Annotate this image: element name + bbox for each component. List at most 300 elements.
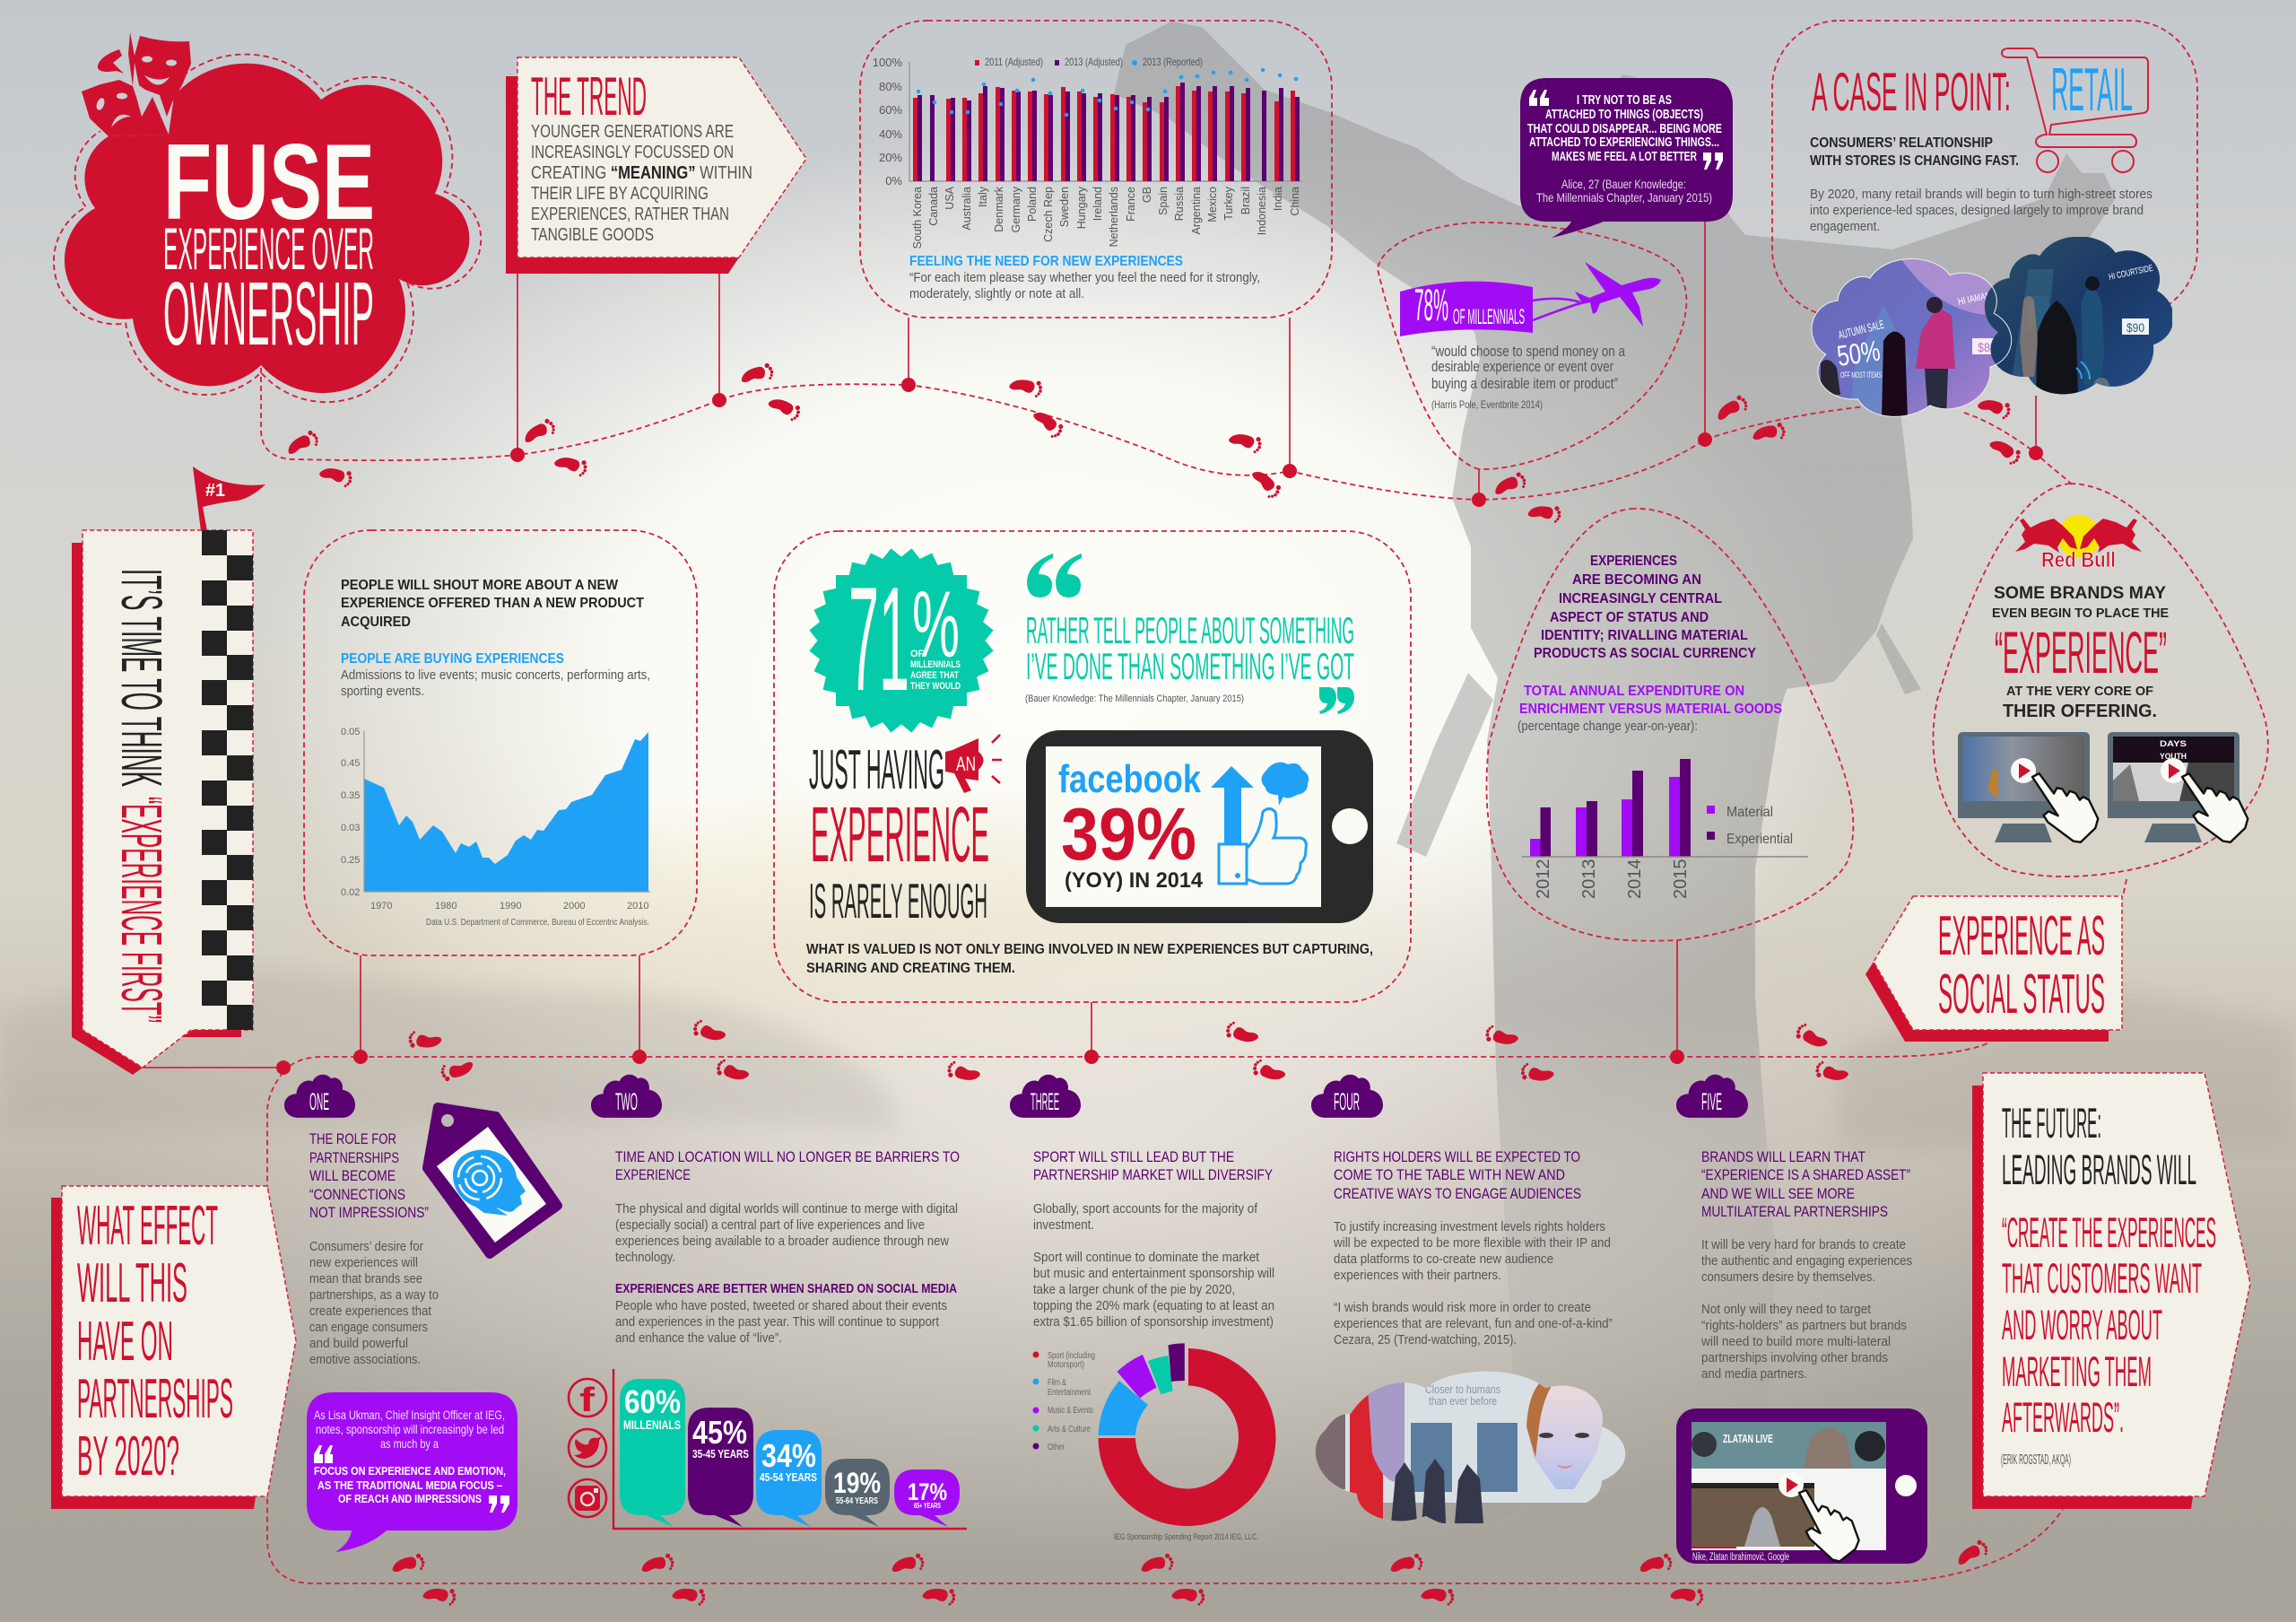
title cloud: Fuse: EXPERIENCE OVER: [163, 215, 374, 282]
trend body text: CREATING “MEANING” WITHIN: [531, 163, 752, 183]
image cloud: autumn sale store: $85: [1978, 340, 1996, 354]
section two body: The physical and digital worlds will continue to merge with digital: [615, 1201, 958, 1216]
area chart: Data U.S. Department of Commerce, Bureau of Eccentric Analysis.: [426, 918, 649, 928]
bar chart by country: India: [1272, 187, 1284, 211]
section five body: will need to build more multi-lateral: [1700, 1334, 1891, 1349]
panel: 78% of millennials: [1378, 222, 1686, 469]
section one body: [309, 1239, 439, 1367]
chart heading: [1518, 684, 1782, 734]
section five body: and media partners.: [1701, 1366, 1807, 1382]
trend body text: [531, 122, 752, 245]
image cloud: courtside store: [1983, 237, 2172, 396]
area chart: 0.05: [341, 727, 360, 737]
retail body text: engagement.: [1810, 219, 1880, 234]
purple statement: ASPECT OF STATUS AND: [1550, 610, 1709, 625]
section five body: It will be very hard for brands to create: [1701, 1237, 1906, 1252]
text: “EXPERIENCE FIRST”: [109, 797, 174, 1023]
panel: 71% of millennials: JUST HAVING: [809, 739, 944, 801]
image cloud: autumn sale store: 50%: [1835, 335, 1883, 372]
callout: lisa ukman quote: FOCUS ON EXPERIENCE AND EMOTION,: [314, 1465, 506, 1478]
bar chart by country: GB: [1141, 187, 1153, 203]
panel: what effect will this have: WHAT EFFECT: [77, 1195, 218, 1257]
quote text: [1431, 343, 1625, 411]
chart heading: TOTAL ANNUAL EXPENDITURE ON: [1524, 684, 1744, 699]
speech bar 19%: [825, 1459, 890, 1527]
trend body text: EXPERIENCES, RATHER THAN: [531, 205, 729, 224]
section five body: consumers desire by themselves.: [1701, 1269, 1875, 1285]
purple quote bubble: Alice: [1520, 78, 1733, 238]
section two heading: TIME AND LOCATION WILL NO LONGER BE BARRIERS TO: [615, 1149, 960, 1165]
badge: 71%: 71: [848, 556, 909, 721]
bar chart by country: Australia: [961, 187, 973, 231]
panel: 71% of millennials: IS RARELY ENOUGH: [809, 873, 987, 929]
closing quote mark: [1703, 153, 1723, 170]
subheading and description: PEOPLE ARE BUYING EXPERIENCES: [341, 651, 564, 667]
panel: red bull: [1933, 484, 2268, 876]
section one body: new experiences will: [309, 1255, 418, 1270]
donut legend: Sport (including: [1048, 1351, 1095, 1361]
section three heading: PARTNERSHIP MARKET WILL DIVERSIFY: [1033, 1167, 1273, 1183]
icon: thumbs up: [1219, 809, 1306, 884]
speech bar 17%: 17%: [908, 1478, 947, 1505]
panel: the future: [1972, 1073, 2250, 1509]
future heading: THE FUTURE:: [2002, 1099, 2101, 1147]
bar chart: material vs experiential: [1522, 759, 1808, 899]
checker pattern: [202, 530, 253, 1030]
quote text: THAT COULD DISAPPEAR... BEING MORE: [1527, 122, 1722, 136]
red bull statement: THEIR OFFERING.: [2003, 702, 2157, 721]
bar chart: material vs experiential: 2014: [1625, 859, 1645, 899]
bar chart by country: [873, 56, 1302, 249]
section three: [1010, 1075, 1275, 1542]
speech bar 45%: [688, 1408, 753, 1527]
opening quote mark: [1529, 90, 1549, 106]
donut legend: Film &: [1048, 1378, 1066, 1388]
quote source: [1536, 177, 1712, 205]
area chart: 1990: [500, 901, 521, 911]
panel heading: EXPERIENCE OFFERED THAN A NEW PRODUCT: [341, 596, 644, 611]
subheading: CONSUMERS’ RELATIONSHIP: [1810, 135, 1993, 151]
section three body: but music and entertainment sponsorship will: [1033, 1266, 1274, 1281]
question heading: BY 2020?: [77, 1426, 179, 1487]
badge: two: [591, 1075, 662, 1118]
callout: lisa ukman quote: notes, sponsorship will increasingly be led: [316, 1423, 504, 1436]
section four heading: [1334, 1149, 1581, 1202]
red bull statement: SOME BRANDS MAY: [1994, 584, 2166, 603]
donut legend: Motorsport): [1048, 1360, 1084, 1370]
logo: red bull: Red Bull: [2041, 548, 2116, 572]
purple statement: INCREASINGLY CENTRAL: [1559, 591, 1722, 606]
purple statement: [1534, 554, 1756, 661]
panel: 71% of millennials: [774, 531, 1411, 1002]
heading: feeling the need: FEELING THE NEED FOR NEW EXPERIENCES: [909, 254, 1183, 269]
speech bar 34%: 45-54 YEARS: [760, 1470, 817, 1484]
section one heading: THE ROLE FOR: [309, 1131, 396, 1147]
section two body: (especially social) a central part of live experiences and live: [615, 1217, 925, 1233]
bar chart by country: China: [1289, 187, 1301, 216]
section five body: partnerships involving other brands: [1701, 1350, 1888, 1365]
section four body: will be expected to be more flexible with their IP and: [1333, 1235, 1611, 1251]
speech bar 34%: [756, 1430, 822, 1527]
video monitor two: YOUTH: [2160, 752, 2187, 761]
legend: [1707, 805, 1793, 847]
section two body: EXPERIENCES ARE BETTER WHEN SHARED ON SOCIAL MEDIA: [615, 1281, 957, 1296]
quote text: [1527, 93, 1722, 164]
speech bar 19%: 55-64 YEARS: [836, 1496, 878, 1506]
section four body: experiences that are relevant, fun and one-of-a-kind”: [1334, 1316, 1613, 1331]
section five body: “rights-holders” as partners but brands: [1701, 1318, 1907, 1333]
bar chart by country: 80%: [879, 80, 902, 93]
footprints along the trails: [284, 362, 2023, 1607]
bar chart by country: 40%: [879, 127, 902, 141]
red bull statement: EVEN BEGIN TO PLACE THE: [1992, 606, 2169, 621]
icon: megaphone: AN: [956, 753, 976, 775]
retail body text: into experience-led spaces, designed largely to improve brand: [1810, 203, 2144, 218]
area chart: 0.25: [341, 855, 360, 866]
donut chart: IEG Sponsorship Spending Report 2014 IEG, LLC.: [1114, 1532, 1258, 1542]
bar chart by country: 60%: [879, 103, 902, 117]
section five heading: BRANDS WILL LEARN THAT: [1701, 1149, 1866, 1165]
bar chart: material vs experiential: 2013: [1579, 859, 1599, 899]
bar chart: material vs experiential: 2012: [1534, 859, 1553, 899]
panel heading: [341, 578, 644, 630]
section two body: technology.: [615, 1250, 675, 1265]
panel heading: PEOPLE WILL SHOUT MORE ABOUT A NEW: [341, 578, 618, 593]
section two body: and enhance the value of “live”.: [615, 1330, 782, 1346]
bar chart by country: Spain: [1157, 187, 1170, 215]
donut legend: Entertainment: [1048, 1388, 1091, 1398]
panel heading: ACQUIRED: [341, 615, 411, 630]
area chart: 0.45: [341, 758, 360, 769]
section one body: create experiences that: [309, 1304, 432, 1319]
section four body: Cezara, 25 (Trend-watching, 2015).: [1334, 1332, 1517, 1347]
donut legend: [1033, 1351, 1095, 1452]
speech bar 45%: 45%: [692, 1414, 747, 1451]
chart legend: 2013 (Adjusted): [1065, 56, 1123, 68]
closing statement: WHAT IS VALUED IS NOT ONLY BEING INVOLVED IN NEW EXPERIENCES BUT CAPTURING,: [806, 942, 1373, 957]
badge: 71%: AGREE THAT: [910, 670, 959, 681]
badge: one: [284, 1075, 355, 1118]
panel: the trend: [506, 57, 806, 274]
panel: a case in point, retail: [1772, 21, 2197, 422]
subheading: WITH STORES IS CHANGING FAST.: [1810, 153, 2019, 169]
quote text: ATTACHED TO EXPERIENCING THINGS...: [1529, 135, 1719, 150]
icon: up arrow: [1211, 766, 1254, 844]
section three body: Sport will continue to dominate the market: [1033, 1250, 1260, 1265]
section four heading: CREATIVE WAYS TO ENGAGE AUDIENCES: [1334, 1186, 1581, 1202]
section five heading: AND WE WILL SEE MORE: [1701, 1186, 1855, 1202]
banner: OF MILLENNIALS: [1453, 305, 1525, 329]
purple statement: IDENTITY; RIVALLING MATERIAL: [1541, 628, 1748, 643]
red bull statement: AT THE VERY CORE OF: [2006, 684, 2153, 699]
quote text: buying a desirable item or product”: [1431, 375, 1618, 392]
quote marks: [1027, 554, 1082, 597]
quote text: “would choose to spend money on a: [1431, 343, 1625, 360]
purple statement: PRODUCTS AS SOCIAL CURRENCY: [1534, 646, 1756, 661]
bar chart by country: Hungary: [1075, 186, 1088, 229]
donut legend: Other: [1048, 1443, 1065, 1452]
section one body: mean that brands see: [309, 1271, 422, 1286]
panel: material vs experiential spending: [1487, 509, 1853, 941]
area chart: 0.03: [341, 823, 360, 833]
section four body: “I wish brands would risk more in order to create: [1334, 1300, 1591, 1315]
section three body: extra $1.65 billion of sponsorship investment): [1033, 1314, 1274, 1330]
section one heading: PARTNERSHIPS: [309, 1150, 399, 1166]
phone with facebook stat: [1026, 730, 1373, 923]
icons: social media: [569, 1379, 606, 1517]
tablet: zlatan live: [1676, 1408, 1927, 1564]
image cloud: autumn sale store: OFF MOST ITEMS: [1840, 371, 1882, 379]
area chart: 2000: [563, 901, 585, 911]
bar chart by country: Mexico: [1206, 187, 1219, 222]
tablet: zlatan live: ZLATAN LIVE: [1723, 1432, 1773, 1445]
quote text: desirable experience or event over: [1431, 358, 1613, 375]
bar chart by country: 0%: [885, 174, 902, 187]
section two: [569, 1075, 967, 1529]
chart legend: 2011 (Adjusted): [985, 56, 1043, 68]
section five: [1676, 1075, 1927, 1564]
panel: the trend: THE TREND: [531, 66, 647, 126]
future heading: [2002, 1099, 2196, 1193]
quote source: The Millennials Chapter, January 2015): [1536, 190, 1712, 205]
section five heading: “EXPERIENCE IS A SHARED ASSET”: [1701, 1167, 1910, 1183]
section four: [1311, 1075, 1627, 1529]
section one heading: “CONNECTIONS: [309, 1187, 405, 1203]
badge: 71%: OF: [910, 649, 925, 659]
section two heading: [615, 1149, 960, 1183]
donut chart: [1033, 1343, 1275, 1542]
banner text: IT’S TIME TO THINK: [109, 569, 174, 787]
panel: 71% of millennials: I’VE DONE THAN SOMETHING I’VE GOT: [1026, 645, 1354, 687]
section one body: and build powerful: [309, 1336, 408, 1351]
closing statement: [806, 942, 1373, 976]
section one body: can engage consumers: [309, 1320, 428, 1335]
bar chart by country: Russia: [1173, 187, 1186, 221]
speech bar 60%: MILLENIALS: [623, 1417, 681, 1432]
banner: [1400, 280, 1580, 336]
section three body: take a larger chunk of the pie by 2020,: [1033, 1282, 1235, 1297]
survey question text: “For each item please say whether you feel the need for it strongly,: [909, 271, 1260, 285]
purple statement: ARE BECOMING AN: [1572, 572, 1701, 588]
subheading and description: Admissions to live events; music concerts, performing arts,: [341, 668, 650, 683]
top journey trail: [261, 222, 2072, 507]
section four body: data platforms to co-create new audience: [1334, 1251, 1553, 1267]
phone with facebook stat: (YOY) IN 2014: [1065, 868, 1204, 893]
section four body: experiences with their partners.: [1334, 1268, 1501, 1283]
chart legend: 2013 (Reported): [1143, 56, 1203, 68]
quote source: (Bauer Knowledge: The Millennials Chapter, January 2015): [1025, 693, 1244, 704]
panel: what effect will this have: PARTNERSHIPS: [77, 1368, 233, 1430]
icon: price tag with head: [427, 1107, 558, 1254]
section three body: Globally, sport accounts for the majority of: [1033, 1201, 1258, 1216]
badge: four: [1311, 1075, 1383, 1118]
lower journey trail: [143, 879, 2126, 1583]
section one: [284, 1075, 558, 1552]
donut legend: Arts & Culture: [1048, 1425, 1091, 1435]
bar chart by country: Canada: [927, 187, 940, 226]
bar chart by country: Denmark: [993, 186, 1005, 232]
bar chart by country: Indonesia: [1256, 187, 1268, 235]
chart heading: ENRICHMENT VERSUS MATERIAL GOODS: [1519, 702, 1782, 717]
badge: three: [1010, 1075, 1081, 1118]
bar chart by country: Argentina: [1190, 187, 1203, 235]
image cloud: autumn sale store: AUTUMN SALE: [1837, 318, 1885, 342]
callout: lisa ukman quote: AS THE TRADITIONAL MEDIA FOCUS –: [317, 1479, 502, 1492]
social status heading: [1938, 905, 2105, 1025]
text: RATHER TELL PEOPLE ABOUT SOMETHING: [1026, 609, 1354, 651]
title text: [163, 122, 375, 364]
speech bar 45%: 35-45 YEARS: [692, 1447, 749, 1461]
section three body: investment.: [1033, 1217, 1094, 1233]
trend body text: YOUNGER GENERATIONS ARE: [531, 122, 734, 142]
title cloud: Fuse: [54, 32, 481, 402]
badge: 71%: %: [912, 572, 960, 677]
section three body: [1033, 1201, 1274, 1330]
quote text: I TRY NOT TO BE AS: [1577, 93, 1672, 108]
section two heading: EXPERIENCE: [615, 1167, 691, 1183]
section three body: topping the 20% mark (equating to at least an: [1033, 1298, 1274, 1313]
bar chart by country: South Korea: [911, 187, 924, 249]
panel: 71% of millennials: EXPERIENCE: [811, 791, 989, 878]
subheading and description: sporting events.: [341, 685, 424, 699]
flag with #1: #1: [205, 481, 225, 501]
speech bar 34%: 34%: [761, 1437, 816, 1474]
speech bar 17%: [894, 1469, 960, 1527]
area chart: 0.35: [341, 790, 360, 801]
retail body text: [1810, 187, 2152, 234]
bar chart by country: 100%: [873, 56, 902, 69]
title cloud: Fuse: OWNERSHIP: [163, 264, 374, 364]
section one heading: NOT IMPRESSIONS”: [309, 1205, 429, 1221]
panel: what effect will this have: [51, 1186, 296, 1509]
image cloud: autumn sale store: [1812, 259, 1998, 416]
bar chart by country: Ireland: [1091, 187, 1104, 221]
trend body text: TANGIBLE GOODS: [531, 225, 654, 245]
panel: experience as social status: [1866, 896, 2122, 1042]
section four heading: RIGHTS HOLDERS WILL BE EXPECTED TO: [1334, 1149, 1580, 1165]
bar chart: material vs experiential: 2015: [1671, 859, 1691, 899]
purple statement: EXPERIENCES: [1590, 554, 1677, 569]
callout: lisa ukman quote: OF REACH AND IMPRESSIONS: [338, 1493, 482, 1505]
section five heading: MULTILATERAL PARTNERSHIPS: [1701, 1204, 1888, 1220]
section five body: the authentic and engaging experiences: [1701, 1253, 1912, 1269]
lettering: just having an experience: [809, 739, 989, 929]
subheading and description: [341, 651, 650, 699]
section two body: experiences being available to a broader audience through new: [615, 1234, 949, 1249]
closing statement: SHARING AND CREATING THEM.: [806, 961, 1015, 976]
bar chart by country: Brazil: [1239, 187, 1252, 214]
title text: FUSE: [163, 122, 375, 242]
area chart: 1970: [370, 901, 392, 911]
section five body: [1700, 1237, 1912, 1382]
silhouette of person with arms raised: [1114, 22, 2116, 1622]
badge: five: [1676, 1075, 1748, 1118]
icon: theatre masks: [82, 32, 191, 136]
section two body: People who have posted, tweeted or shared about their events: [615, 1298, 947, 1313]
retail body text: By 2020, many retail brands will begin to turn high-street stores: [1810, 187, 2152, 202]
bar chart by country: Czech Rep: [1042, 187, 1055, 242]
checkered banner: experience first: [72, 530, 253, 1075]
bar chart by country: Sweden: [1058, 187, 1071, 227]
panel: area chart, people are buying experiences: [304, 530, 697, 955]
badge: three: THREE: [1031, 1088, 1059, 1115]
quote text: MAKES ME FEEL A LOT BETTER: [1552, 150, 1697, 164]
phone with facebook stat: facebook: [1058, 757, 1201, 801]
section three heading: [1033, 1149, 1273, 1183]
legend: Material: [1726, 805, 1773, 820]
badge: five: FIVE: [1701, 1088, 1722, 1115]
bar chart by country: Poland: [1026, 187, 1039, 222]
chart heading: (percentage change year-on-year):: [1518, 719, 1698, 734]
icons: social media: f: [579, 1382, 595, 1419]
section four body: [1333, 1219, 1613, 1347]
section one body: Consumers’ desire for: [309, 1239, 423, 1254]
icon: speech cloud: [1261, 763, 1309, 806]
callout: lisa ukman quote: As Lisa Ukman, Chief Insight Officer at IEG,: [314, 1408, 505, 1422]
icon: megaphone: [945, 735, 1002, 793]
bar chart by country: 20%: [879, 151, 902, 164]
video monitor one: [1958, 732, 2100, 847]
donut legend: Music & Events: [1048, 1406, 1093, 1416]
red bull statement: [1992, 584, 2169, 721]
speech bar 17%: 65+ YEARS: [914, 1502, 941, 1510]
bar chart by country: Germany: [1010, 186, 1022, 232]
image cloud: digital billboard: than ever before: [1429, 1394, 1497, 1408]
question heading: WILL THIS: [77, 1252, 187, 1314]
speech bar 60%: 60%: [624, 1383, 681, 1420]
question heading: [77, 1195, 233, 1487]
quote source: Alice, 27 (Bauer Knowledge:: [1561, 177, 1686, 191]
video monitor two: [2108, 732, 2250, 847]
image cloud: digital billboard: Closer to humans: [1425, 1382, 1500, 1396]
panel: a case in point, retail: A CASE IN POINT:: [1812, 62, 2011, 122]
badge: 71%: [809, 548, 994, 733]
legend: Experiential: [1726, 832, 1793, 847]
icon: airplane: [1575, 262, 1661, 327]
section three heading: SPORT WILL STILL LEAD BUT THE: [1033, 1149, 1234, 1165]
bar chart by country: Italy: [977, 186, 989, 207]
quote text: (Harris Pole, Eventbrite 2014): [1431, 398, 1543, 411]
badge: 71%: THEY WOULD: [910, 681, 961, 692]
image cloud: digital billboard: [1313, 1369, 1627, 1529]
section one heading: [309, 1131, 429, 1221]
section two body: [615, 1201, 958, 1346]
speech bar 60%: [620, 1379, 685, 1527]
section one heading: WILL BECOME: [309, 1168, 396, 1184]
area chart: 0.02: [341, 887, 360, 898]
teal quote text: [1026, 609, 1354, 687]
chart: social sharing by age: [613, 1369, 967, 1529]
section four body: To justify increasing investment levels rights holders: [1334, 1219, 1605, 1234]
image cloud: autumn sale store: HI IAMAM: [1957, 290, 1993, 308]
section one body: emotive associations.: [309, 1352, 421, 1367]
area chart: 2010: [627, 901, 648, 911]
panel: the future: (ERIK ROGSTAD, AKQA): [2001, 1452, 2071, 1468]
image cloud: courtside store: HI COURTSIDE: [2108, 264, 2154, 283]
area chart: [341, 727, 650, 928]
survey question text: [909, 271, 1260, 301]
section one body: partnerships, as a way to: [309, 1287, 439, 1303]
area chart: 1980: [435, 901, 457, 911]
subheading: [1810, 135, 2019, 169]
section two body: and experiences in the past year. This will continue to support: [615, 1314, 940, 1330]
video monitor two: DAYS: [2160, 739, 2187, 748]
section five body: Not only will they need to target: [1701, 1302, 1872, 1317]
logo: red bull: [2015, 515, 2142, 572]
chart legend: [975, 56, 1203, 68]
tablet: zlatan live: Nike, Zlatan Ibrahimović, Google: [1692, 1552, 1789, 1563]
section five heading: [1701, 1149, 1910, 1220]
